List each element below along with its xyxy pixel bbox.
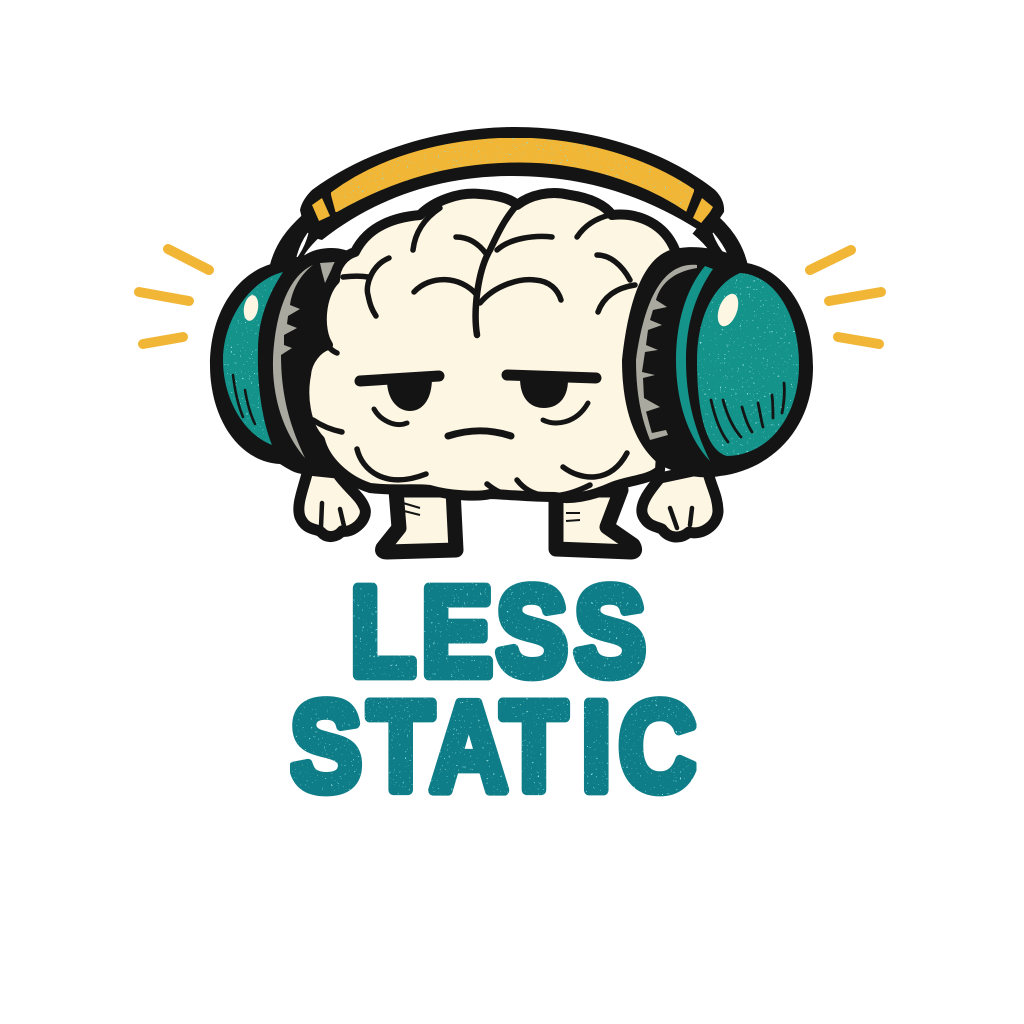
left arm [299, 470, 365, 537]
title: LESS STATIC [290, 561, 696, 817]
left leg [382, 490, 456, 552]
headband [300, 127, 724, 240]
left ear cup [210, 248, 360, 474]
face: left eye [360, 376, 439, 425]
right leg [556, 490, 635, 552]
brain [304, 193, 675, 498]
sound lines: left [139, 249, 209, 344]
face: mouth [448, 431, 511, 436]
brain folds [313, 205, 635, 496]
right arm [642, 468, 718, 537]
title line 1: LESS [350, 561, 646, 702]
headphone wire: left [283, 225, 312, 270]
headphone wire: right [702, 222, 734, 272]
brain outline [304, 193, 675, 498]
sound lines: right [810, 250, 881, 344]
title line 2: STATIC [290, 676, 696, 817]
right ear cup [622, 247, 813, 477]
face: right eye [507, 375, 596, 423]
